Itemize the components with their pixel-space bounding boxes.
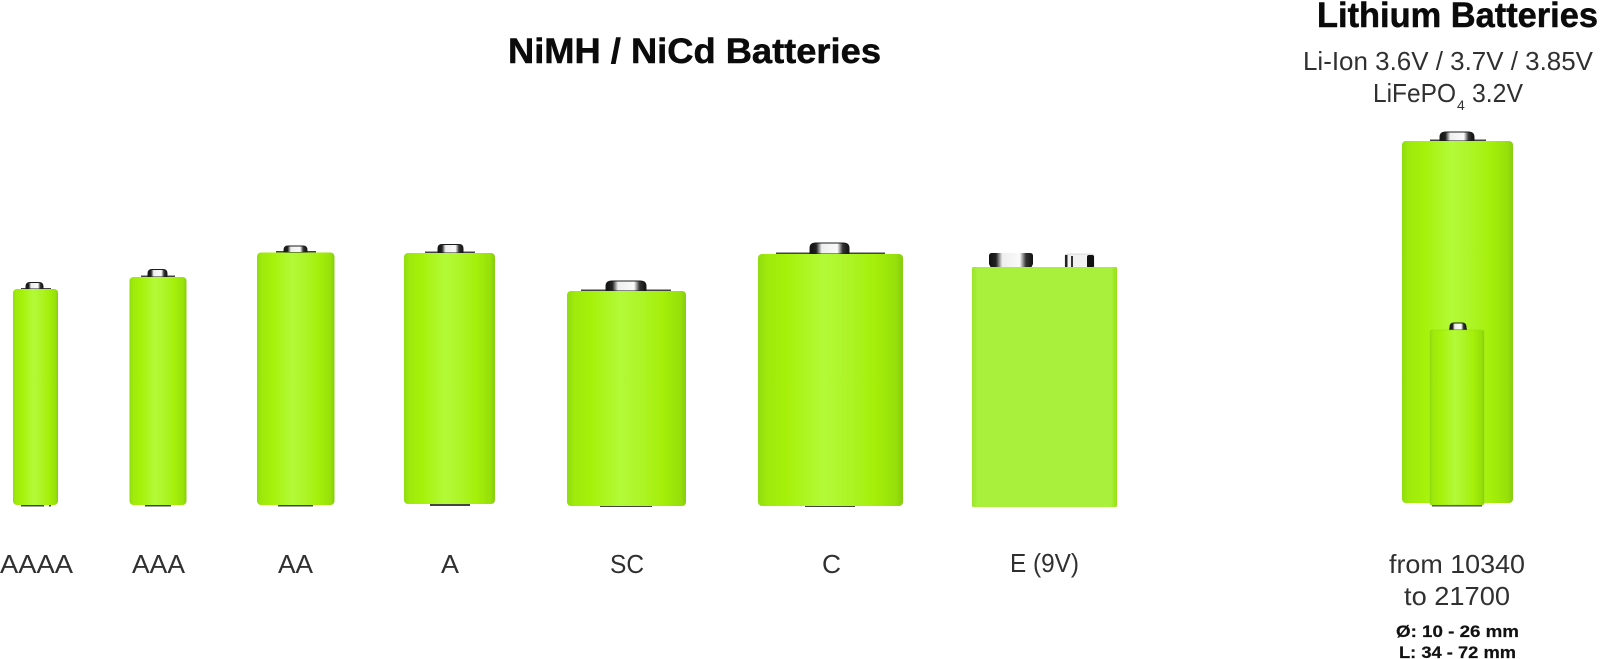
label: E (9V): E (9V) [1010,548,1079,578]
label: AAAA: AAAA [0,549,74,579]
terminal: large [989,253,1033,268]
text: lithium voltages: 4 [1457,97,1465,113]
battery: small lithium cell [1430,323,1484,506]
label: AA: AA [278,549,314,579]
battery: SC [567,281,686,507]
battery: AA [257,246,334,506]
label: lithium size range: to 21700 [1404,581,1510,611]
label: lithium size range: from 10340 [1389,549,1525,579]
battery: A [404,244,495,506]
label: lithium size range [1389,549,1525,611]
battery: large lithium cell [1402,132,1513,503]
label: lithium dimensions [1396,622,1519,659]
battery: C [758,243,903,507]
text: lithium voltages: Li-Ion 3.6V / 3.7V / 3.85V [1303,46,1594,76]
title: NiMH / NiCd Batteries: NiMH / NiCd Batteries [508,32,881,71]
text: lithium voltages [1303,46,1594,113]
label: A: A [441,549,460,579]
label: AAA: AAA [132,549,186,579]
battery: AAA [130,270,186,506]
battery: AAAA [13,282,58,506]
text: lithium voltages: 3.2V [1472,78,1524,108]
label: C: C [822,549,841,579]
label: SC: SC [610,549,644,579]
battery: E (9V) [972,253,1117,507]
label: lithium dimensions: Ø: 10 - 26 mm [1396,622,1519,641]
text: lithium voltages: LiFePO [1373,78,1456,108]
terminal: small [1065,254,1094,268]
